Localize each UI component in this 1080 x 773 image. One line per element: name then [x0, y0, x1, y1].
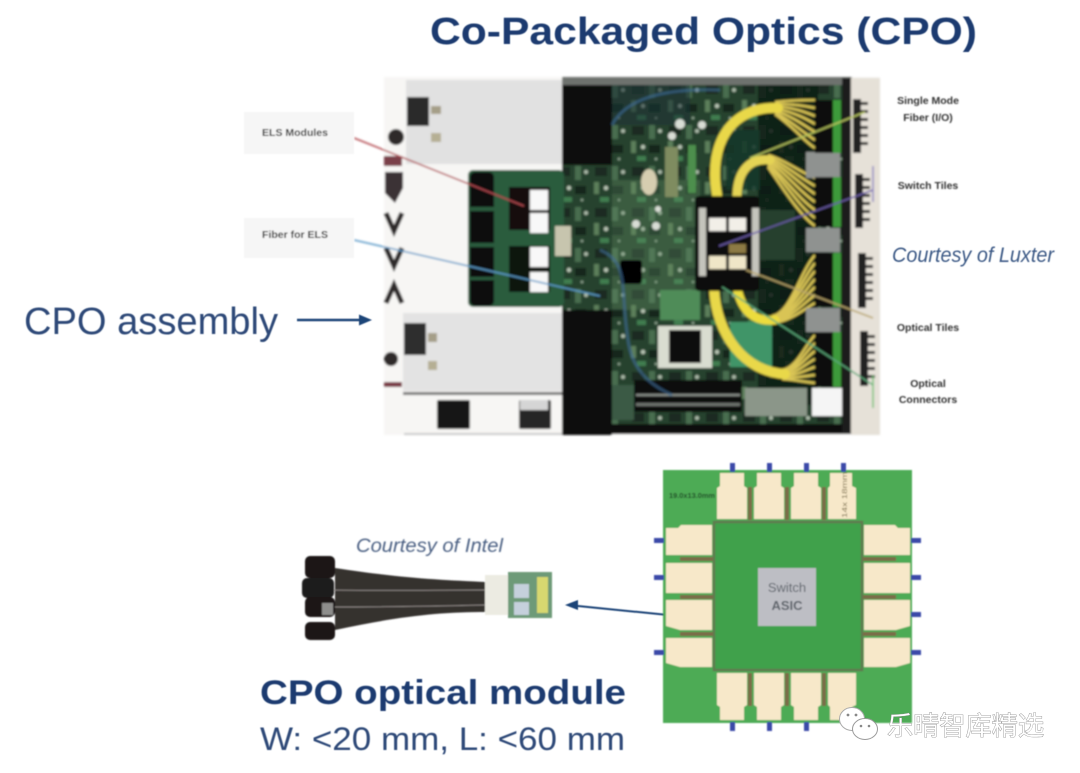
label: Fiber for ELS: Fiber for ELS [262, 229, 328, 241]
inner die area [714, 522, 862, 670]
CPO optical module heading: CPO optical module [260, 674, 626, 712]
main board [612, 85, 844, 424]
arrow: ASIC module to optical module [565, 600, 678, 616]
title: Co-Packaged Optics (CPO) [430, 11, 977, 53]
optical connector rows [815, 100, 842, 387]
label: ELS Modules: ELS Modules [262, 127, 328, 139]
bottom optical tiles [717, 673, 856, 720]
label: Single Mode Fiber: Fiber (I/O) [903, 112, 953, 124]
watermark: WeChat source badge [840, 708, 1044, 741]
rear blocks [404, 400, 564, 435]
CPO optical module dimensions: W: <20 mm, L: <60 mm [260, 721, 625, 757]
CPO assembly label with arrow: CPO assembly [24, 301, 278, 343]
label: Switch Tiles: Switch Tiles [898, 180, 958, 192]
dark region around fibers [758, 85, 818, 405]
panel: CPO assembly chassis photo [354, 77, 880, 435]
Switch ASIC chip: Switch [768, 580, 806, 595]
yellow fiber fans [768, 100, 815, 383]
callout lines [354, 112, 873, 408]
photo: CPO optical module with fiber cable [302, 536, 552, 640]
blue routing fiber [600, 90, 720, 395]
right optical tiles [864, 525, 910, 667]
top power supply [406, 80, 563, 164]
Switch ASIC chip: ASIC [771, 598, 803, 613]
watermark: WeChat source badge: 乐晴智库精选 [887, 711, 1044, 741]
tile separators [680, 487, 896, 706]
label: Fiber for ELS [244, 218, 354, 258]
connector pins [654, 463, 921, 731]
left edge handles [384, 129, 404, 387]
photo: CPO optical module with fiber cable: Courtesy of Intel [356, 536, 504, 557]
label: Single Mode Fiber: Single Mode [897, 95, 959, 107]
left optical tiles [666, 525, 712, 667]
panel: switch ASIC package diagram [654, 463, 921, 731]
panel: switch ASIC package diagram: 14x 18mm [842, 472, 849, 518]
right gray spacers [806, 152, 840, 178]
black bays [562, 79, 612, 165]
black right column [842, 78, 851, 434]
switch tile package [695, 196, 759, 291]
label: Optical Tiles: Optical Tiles [897, 322, 959, 334]
dimension labels: 19.0x13.0mm [669, 493, 715, 500]
top optical tiles [717, 473, 856, 519]
connector combs [853, 99, 875, 386]
label: Optical Connectors [899, 378, 957, 406]
label: Courtesy of Luxter: Courtesy of Luxter [892, 244, 1055, 267]
label: Optical Connectors: Optical [910, 378, 946, 390]
mainboard features [612, 119, 807, 420]
label: Optical Connectors: Connectors [899, 394, 957, 406]
ELS modules [468, 170, 571, 307]
Switch ASIC chip [758, 568, 816, 626]
bottom power supply [403, 313, 563, 395]
label: ELS Modules [244, 112, 354, 154]
yellow fiber bundles [714, 108, 785, 374]
label: Single Mode Fiber [897, 95, 959, 124]
substrate [663, 470, 912, 723]
